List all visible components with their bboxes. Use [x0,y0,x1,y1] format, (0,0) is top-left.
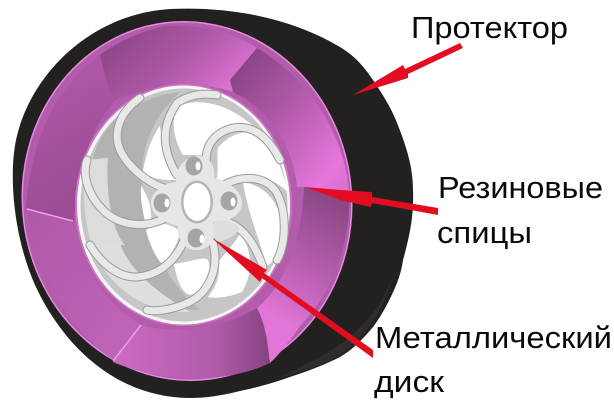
label: Металлический диск: диск [374,364,444,399]
hub disc [151,156,242,250]
inner barrel shading [87,92,200,310]
lug holes [154,156,238,248]
arrow: tread [353,43,463,95]
label: Резиновые спицы: Резиновые [438,170,603,205]
wheel [2,3,413,399]
centre bore [181,180,213,224]
arrow: rubber spokes [305,187,438,215]
tire with tread [13,9,413,398]
label: Резиновые спицы [437,170,603,250]
label: Протектор: Протектор [411,10,568,45]
arrow: metal disc [212,238,373,358]
pink rubber face [2,3,372,399]
label: Металлический диск [374,320,612,399]
rubber spokes and shaded cells [26,26,349,378]
white windows between spokes [141,102,288,298]
metal rim [75,84,292,326]
label: Металлический диск: Металлический [375,320,612,355]
label: Резиновые спицы: спицы [437,215,532,250]
wheel spokes [85,94,284,311]
